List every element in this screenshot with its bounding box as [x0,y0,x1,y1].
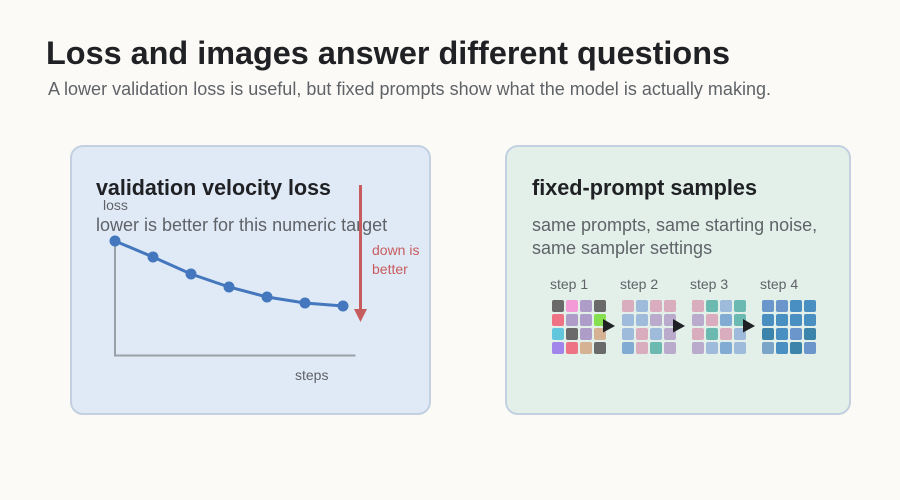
x axis label: steps [295,367,328,383]
panel note: lower is better for this numeric target [96,215,387,235]
loss line chart [110,236,348,312]
step 2 grid [620,276,676,354]
step 3 grid [690,276,746,354]
step 4 grid [760,276,816,354]
subtitle: A lower validation loss is useful, but fixed prompts show what the model is actually making. [48,79,771,99]
callout: down is better: down is [372,242,419,258]
panel: fixed-prompt samples [506,146,850,414]
panel heading: validation velocity loss: validation velocity loss [96,175,331,200]
step 4 grid: step 4 [760,276,798,292]
title: Loss and images answer different questions [46,35,730,71]
step 1 grid: step 1 [550,276,588,292]
panel note: same prompts, same starting noise, [532,215,817,235]
arrow: step 1 to step 2 [603,319,615,332]
panel heading: fixed-prompt samples: fixed-prompt samples [532,175,757,200]
step 2 grid: step 2 [620,276,658,292]
panel note: same sampler settings [532,238,712,258]
y axis label: loss [103,197,128,213]
panel: validation velocity loss [71,146,430,414]
arrow: step 2 to step 3 [673,319,685,332]
arrow: step 3 to step 4 [743,319,755,332]
chart axes [115,241,356,356]
arrow: down is better [354,185,367,322]
callout: down is better: better [372,261,408,277]
step 3 grid: step 3 [690,276,728,292]
step 1 grid [550,276,606,354]
